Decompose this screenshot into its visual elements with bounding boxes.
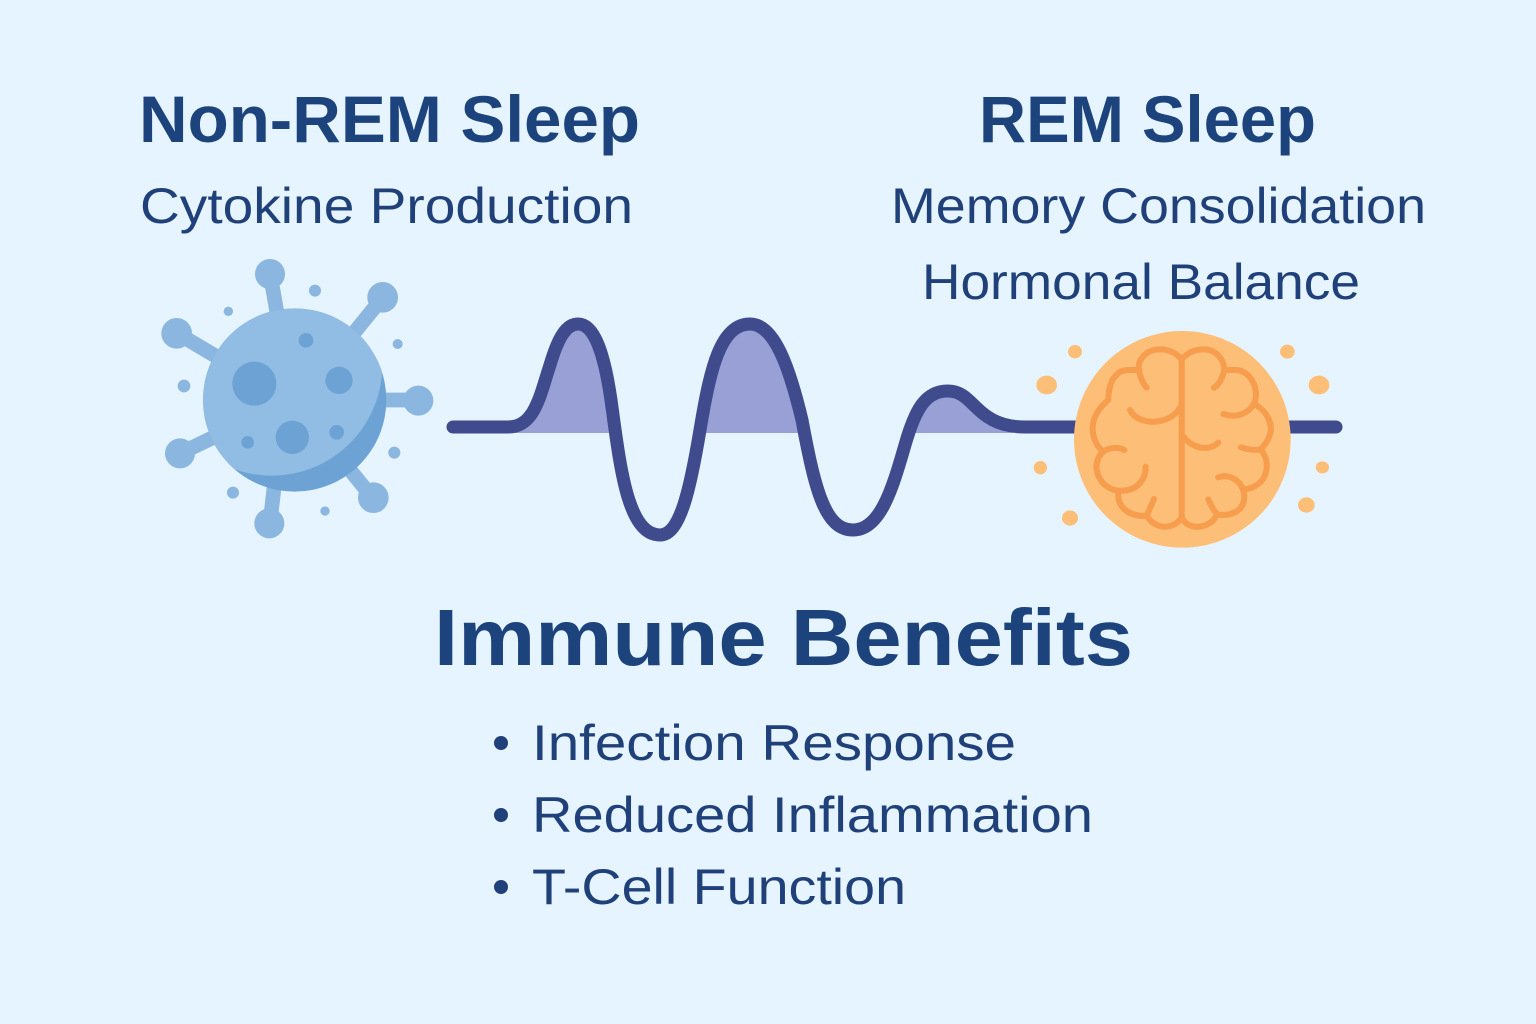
list: benefits bbox=[494, 715, 1093, 915]
list item: T-Cell Function: T-Cell Function bbox=[532, 859, 906, 915]
text: Cytokine Production: Cytokine Production bbox=[140, 178, 633, 234]
heading: Immune Benefits: Immune Benefits bbox=[434, 593, 1133, 682]
list item: Reduced Inflammation: Reduced Inflammation bbox=[532, 787, 1093, 843]
heading: REM Sleep: REM Sleep bbox=[979, 82, 1316, 156]
chart: sleep wave bbox=[453, 324, 1336, 535]
heading: Non-REM Sleep: Non-REM Sleep bbox=[139, 82, 640, 156]
icon: brain bbox=[1034, 331, 1329, 548]
text: Memory Consolidation: Memory Consolidation bbox=[891, 178, 1426, 234]
icon: virus bbox=[161, 254, 433, 538]
list item: Infection Response: Infection Response bbox=[532, 715, 1016, 771]
text: Hormonal Balance: Hormonal Balance bbox=[922, 254, 1360, 310]
